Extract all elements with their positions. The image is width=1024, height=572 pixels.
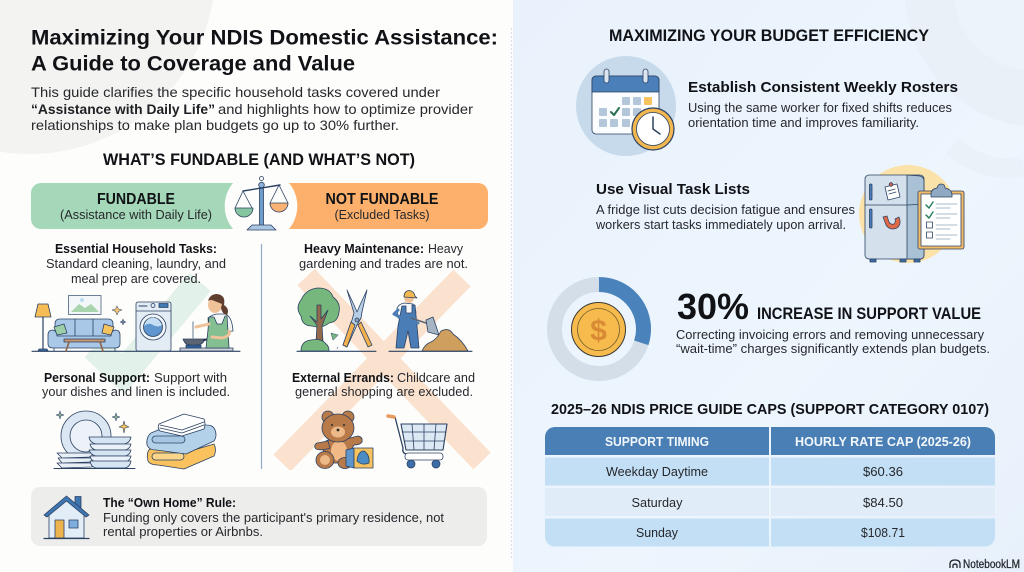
text: heavy maintenance <box>299 242 468 271</box>
panel: own home rule <box>31 487 487 546</box>
text: weekly rosters: orientation time and improves familiarity. <box>688 116 919 130</box>
intro text <box>31 84 473 133</box>
watermark: orange cross <box>282 277 482 463</box>
divider <box>260 244 262 469</box>
text: personal support <box>42 371 230 399</box>
row: weekday daytime: $60.36 <box>863 465 903 479</box>
panel: right background <box>512 0 1024 572</box>
text: weekly rosters <box>688 79 958 130</box>
text: essential household tasks: Essential Household Tasks: <box>55 242 217 256</box>
text: own home rule: Funding only covers the participant's primary residence, not <box>103 511 445 525</box>
stat: 30 percent increase: Correcting invoicing errors and removing unnecessary <box>676 328 985 342</box>
row: sunday <box>545 518 995 546</box>
watermark: green check <box>94 282 200 374</box>
banner: not fundable <box>289 183 488 229</box>
stat: 30 percent increase: 30% <box>677 286 749 327</box>
row: weekday daytime: Weekday Daytime <box>606 465 708 479</box>
banner: not fundable: NOT FUNDABLE <box>326 191 438 208</box>
text: external errands: general shopping are excluded. <box>295 385 473 399</box>
intro text: This guide clarifies the specific household tasks covered under <box>31 84 440 100</box>
text: visual task lists: workers start tasks immediately upon arrival. <box>595 218 846 232</box>
text: essential household tasks: Standard cleaning, laundry, and <box>46 257 226 271</box>
text: external errands <box>292 371 475 399</box>
illustration: dishes and linen <box>54 411 216 469</box>
banner: fundable: (Assistance with Daily Life) <box>60 207 212 222</box>
intro text: relationships to make plan budgets go up to 30% further. <box>31 117 399 133</box>
text: heavy maintenance: Heavy <box>428 242 464 256</box>
text: own home rule: rental properties or Airbnbs. <box>103 525 263 539</box>
row: saturday <box>545 488 995 516</box>
table header <box>545 427 995 455</box>
banner: fundable <box>31 183 233 229</box>
text: heavy maintenance: gardening and trades are not. <box>299 257 468 271</box>
chart: 30 percent donut <box>554 284 644 374</box>
text: essential household tasks <box>46 242 226 286</box>
text: visual task lists <box>595 181 855 232</box>
icon: fridge and clipboard <box>859 165 964 263</box>
panel: left background <box>0 0 513 572</box>
row: saturday: Saturday <box>632 496 683 510</box>
text: essential household tasks: meal prep are covered. <box>71 272 201 286</box>
icon: calendar and clock <box>576 56 676 156</box>
title <box>31 26 498 76</box>
illustration: gardening and trades <box>297 288 472 351</box>
title: Maximizing Your NDIS Domestic Assistance: <box>31 26 498 50</box>
icon: dollar coin: $ <box>590 314 607 348</box>
text: personal support: Support with <box>154 371 227 385</box>
stat: 30 percent increase <box>676 286 990 356</box>
text: external errands: External Errands: <box>292 371 394 385</box>
row: sunday: Sunday <box>636 526 679 540</box>
text: weekly rosters: Establish Consistent Weekly Rosters <box>688 79 958 96</box>
heading: what's fundable: WHAT’S FUNDABLE (AND WHAT’S NOT) <box>103 151 415 169</box>
text: personal support: Personal Support: <box>44 371 150 385</box>
text: own home rule <box>103 496 445 539</box>
title: A Guide to Coverage and Value <box>31 52 355 76</box>
text: visual task lists: Use Visual Task Lists <box>596 181 750 198</box>
row: weekday daytime <box>545 458 995 486</box>
intro text: and highlights how to optimize provider <box>218 101 473 117</box>
row: sunday: $108.71 <box>861 526 905 540</box>
stat: 30 percent increase: INCREASE IN SUPPORT VALUE <box>757 305 981 323</box>
table header: HOURLY RATE CAP (2025-26) <box>795 435 971 449</box>
banner: fundable: FUNDABLE <box>97 191 175 208</box>
heading: price guide caps: 2025–26 NDIS PRICE GUIDE CAPS (SUPPORT CATEGORY 0107) <box>551 401 989 418</box>
intro text: “Assistance with Daily Life” <box>31 101 215 117</box>
heading: maximizing budget efficiency: MAXIMIZING YOUR BUDGET EFFICIENCY <box>609 27 929 45</box>
text: visual task lists: A fridge list cuts decision fatigue and ensures <box>596 203 855 217</box>
table: price caps <box>545 427 995 546</box>
text: external errands: Childcare and <box>397 371 475 385</box>
table header: SUPPORT TIMING <box>605 435 709 449</box>
text: own home rule: The “Own Home” Rule: <box>103 496 236 510</box>
text: personal support: your dishes and linen is included. <box>42 385 230 399</box>
icon: balance scale <box>235 176 288 230</box>
icon: house <box>44 496 89 538</box>
stat: 30 percent increase: “wait-time” charges significantly extends plan budgets. <box>676 342 990 356</box>
illustration: teddy and cart <box>315 411 447 468</box>
text: weekly rosters: Using the same worker for fixed shifts reduces <box>688 101 952 115</box>
row: saturday: $84.50 <box>863 496 903 510</box>
text: heavy maintenance: Heavy Maintenance: <box>304 242 424 256</box>
banner: not fundable: (Excluded Tasks) <box>334 207 430 222</box>
illustration: household tasks <box>32 294 240 351</box>
